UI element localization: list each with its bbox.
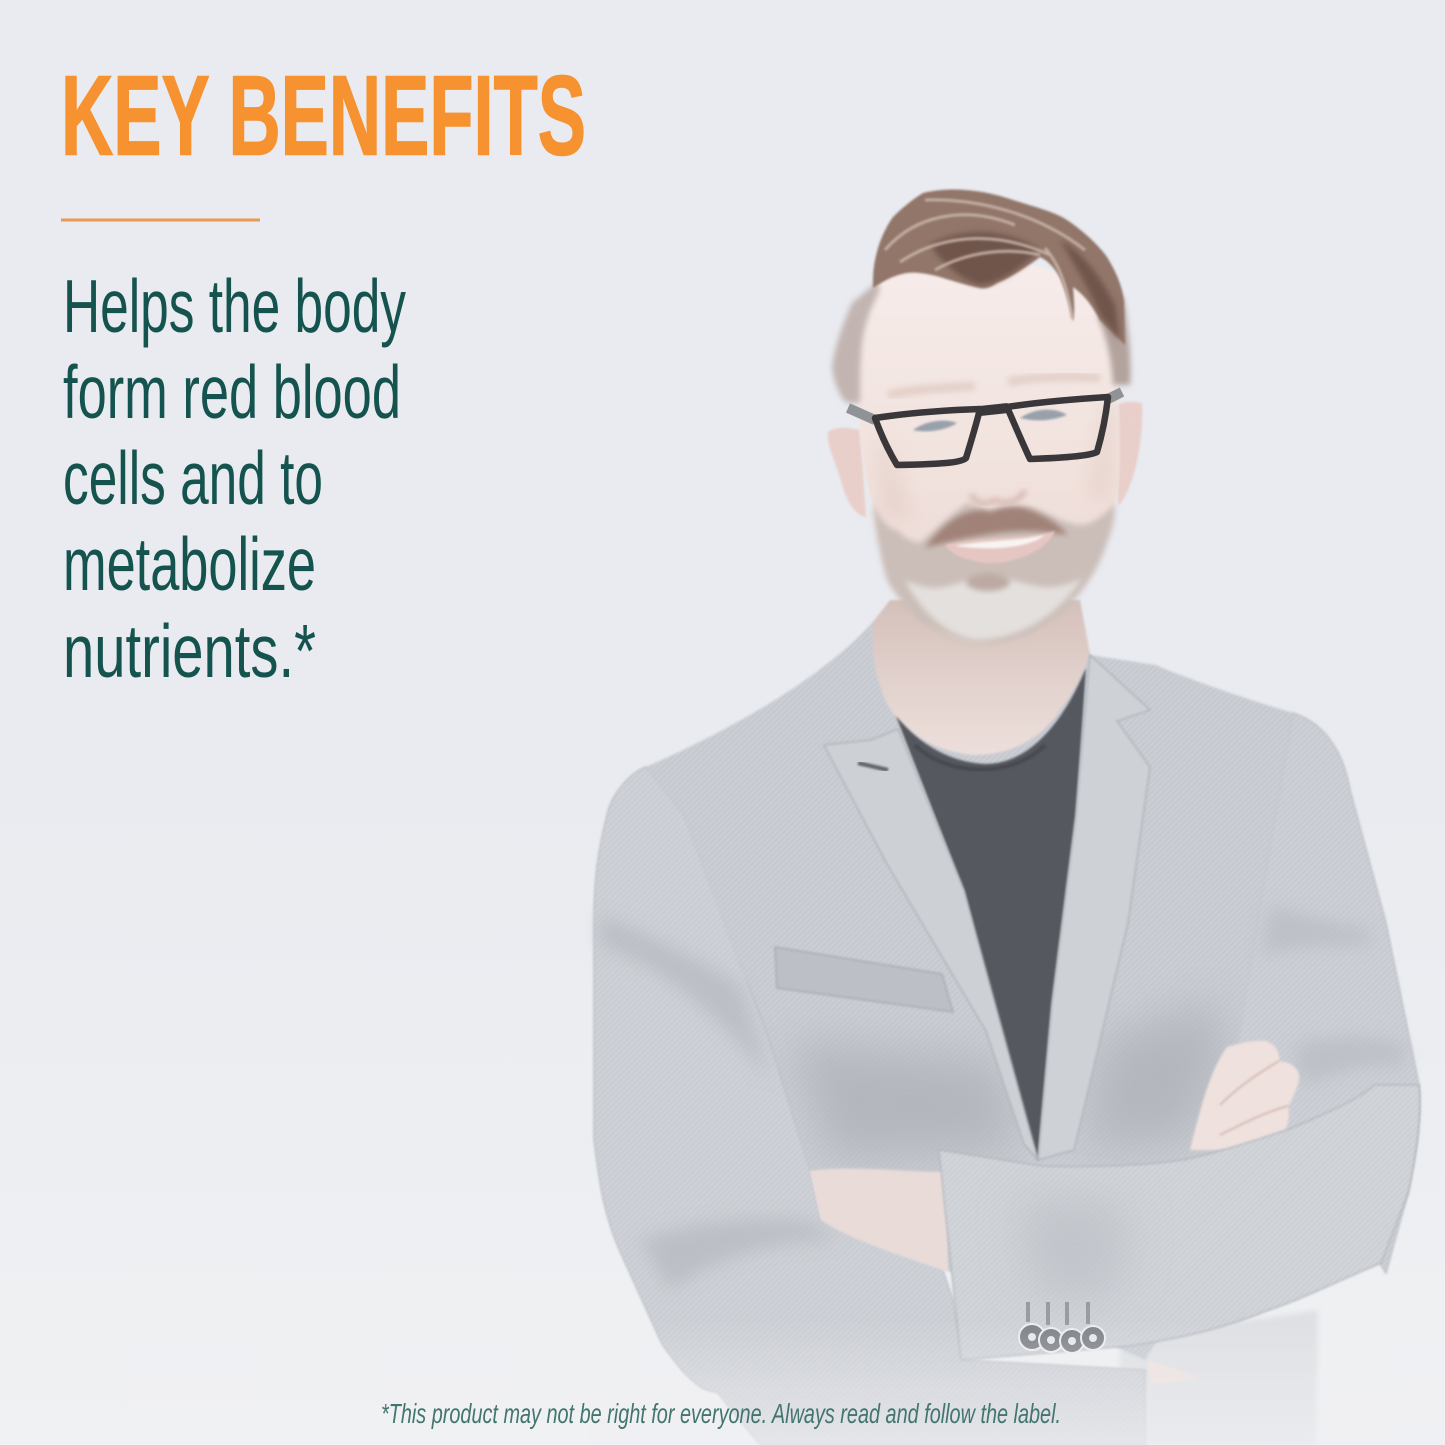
left sleeve shading (600, 915, 840, 1290)
shirt collar shading (915, 745, 1045, 769)
breast pocket (775, 947, 953, 1012)
right arm shading (1262, 905, 1405, 1085)
mustache (925, 506, 1068, 548)
cheek shading (875, 400, 1118, 520)
right upper arm sleeve (1238, 713, 1420, 1273)
eyebrows (888, 377, 1100, 395)
bottom fade (590, 1320, 1445, 1445)
body text: Helps the body (63, 264, 406, 348)
top hair (873, 189, 1125, 345)
dark hair front (930, 232, 1120, 340)
left sleeve weave (594, 767, 1145, 1445)
forearm with cuff (939, 1085, 1420, 1360)
neck (872, 600, 1090, 755)
lapel buttonhole (858, 763, 888, 770)
left side hair (832, 282, 880, 403)
lower jacket fading out (1120, 1310, 1318, 1445)
dark t-shirt (896, 668, 1086, 1160)
right arm weave (1238, 713, 1420, 1273)
jacket torso (646, 622, 1293, 1360)
forearm weave (939, 1085, 1420, 1360)
torso shading (790, 1000, 1225, 1160)
body text (63, 264, 406, 693)
photo: man with crossed arms (590, 189, 1445, 1445)
eyes (913, 410, 1067, 431)
torso weave (646, 622, 1293, 1360)
left sleeve (594, 767, 1145, 1445)
jacket right lapel (1038, 655, 1150, 1160)
divider rule (61, 218, 260, 222)
beard (873, 503, 1115, 644)
right ear (1118, 402, 1142, 505)
left ear (828, 428, 866, 517)
white chin beard (905, 578, 1082, 640)
wrist skin (810, 1169, 948, 1272)
face (858, 258, 1120, 643)
hair highlights (885, 200, 1085, 318)
jacket left lapel (824, 729, 1038, 1160)
mouth and teeth (945, 531, 1055, 563)
glasses (848, 392, 1122, 465)
title: KEY BENEFITS (61, 52, 586, 178)
right side hair (1098, 297, 1131, 385)
hand fingers (1190, 1041, 1299, 1150)
body text: metabolize (63, 522, 316, 606)
soul patch (966, 573, 1010, 591)
nose (970, 490, 1025, 503)
footnote: *This product may not be right for everyone. Always read and follow the label. (381, 1398, 1061, 1429)
forearm shading (1020, 1198, 1130, 1299)
sleeve buttons (1019, 1302, 1105, 1353)
body text: cells and to (63, 436, 323, 520)
body text: form red blood (63, 350, 401, 434)
body text: nutrients.* (63, 609, 316, 693)
hand below the cuff (1148, 1360, 1200, 1385)
